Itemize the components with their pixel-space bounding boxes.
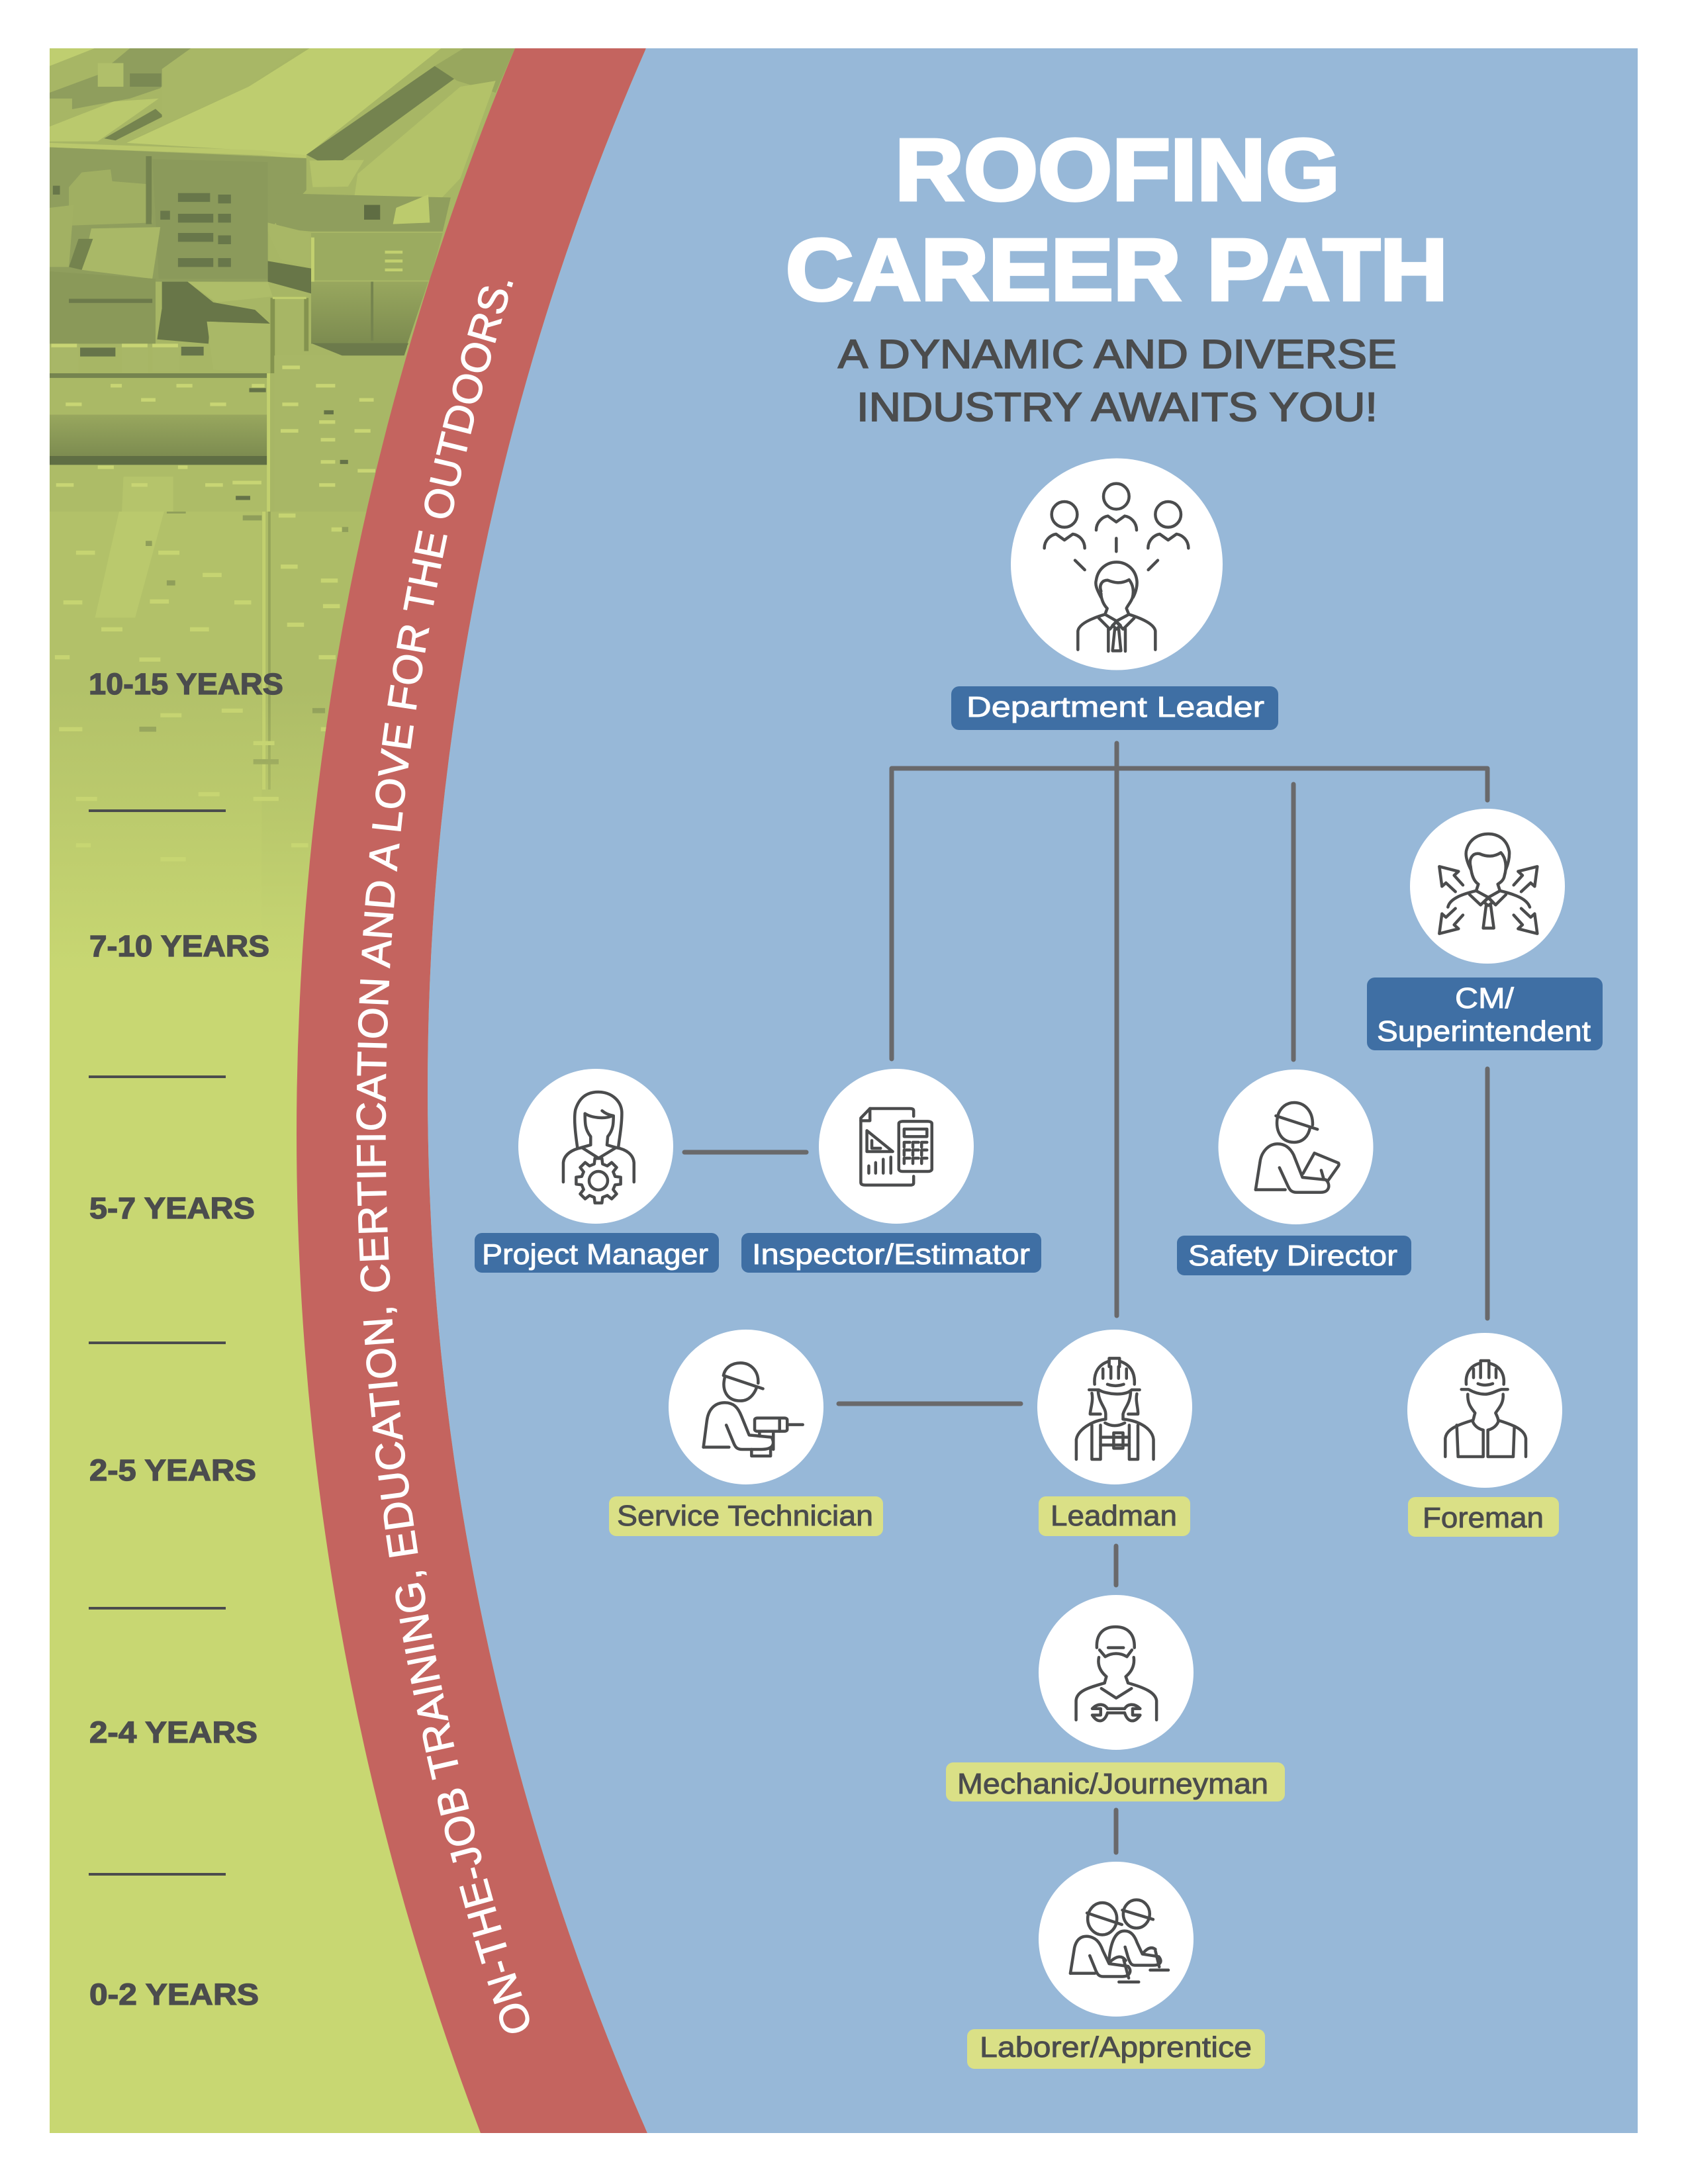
node: CM / Superintendent [1367,809,1603,1050]
node: Department Leader [951,458,1278,730]
timeline: years of experience: 10-15 YEARS [89,667,283,701]
timeline: years of experience: 2-4 YEARS [89,1715,258,1749]
title [786,121,1448,318]
label: CM / Superintendent: CM/ [1455,982,1515,1015]
node: Safety Director [1177,1069,1411,1275]
icon: woman with gear [563,1092,634,1203]
photo: roofing building aerial tinted green [50,48,530,889]
label: Service Technician: Service Technician [617,1500,873,1532]
curved band: red arc [297,48,647,2133]
icon: manager with arrows [1439,834,1537,934]
icon: technician with drill [704,1363,803,1456]
timeline: years of experience: 0-2 YEARS [89,1978,259,2011]
timeline: years of experience: 5-7 YEARS [89,1191,255,1225]
label: Department Leader: Department Leader [966,691,1264,723]
label: Leadman [1039,1496,1190,1536]
label: Safety Director [1177,1236,1411,1275]
node: Service Technician [609,1330,883,1536]
icon: plans and calculator [861,1109,932,1185]
label: Project Manager: Project Manager [482,1238,708,1271]
timeline: years of experience [89,667,283,2011]
icon: worker with clipboard [1256,1103,1339,1193]
node: Laborer/Apprentice [967,1862,1265,2069]
subtitle: INDUSTRY AWAITS YOU! [857,385,1378,430]
node: Foreman [1407,1333,1562,1537]
label: Leadman: Leadman [1051,1500,1177,1532]
subtitle [838,332,1397,430]
node: Inspector/Estimator [741,1069,1041,1273]
icon: worker with hard hat and harness [1076,1358,1154,1459]
label: CM / Superintendent [1367,978,1603,1050]
label: Safety Director: Safety Director [1188,1240,1397,1272]
curved text: training tagline: ON-THE-JOB TRAINING, EDUCATION, CERTIFICATION AND A LOVE FOR THE OUTDOORS. [356,281,530,2033]
timeline: years of experience: 2-5 YEARS [89,1453,256,1487]
title: CAREER PATH [786,221,1448,318]
node: Leadman [1037,1330,1192,1536]
timeline: years of experience: 7-10 YEARS [89,929,269,963]
subtitle: A DYNAMIC AND DIVERSE [838,332,1397,377]
icon: foreman with hard hat and vest [1445,1361,1526,1457]
node: Project Manager [475,1069,719,1273]
icon: two apprentices working [1070,1900,1168,1982]
icon: mechanic with wrench [1076,1627,1156,1721]
panel: blue career chart background [428,48,1638,2133]
label: Inspector/Estimator [741,1233,1041,1273]
label: Department Leader [951,686,1278,730]
label: Mechanic/Journeyman: Mechanic/Journeyman [957,1768,1268,1800]
connector lines [684,743,1487,1852]
label: Foreman [1408,1497,1559,1537]
label: Inspector/Estimator: Inspector/Estimator [752,1238,1030,1271]
label: Laborer/Apprentice [967,2029,1265,2069]
label: CM / Superintendent: Superintendent [1377,1015,1591,1048]
title: ROOFING [895,121,1340,218]
label: Foreman: Foreman [1423,1502,1544,1534]
node: Mechanic/Journeyman [946,1595,1285,1801]
icon: leader with team [1045,484,1188,651]
panel: lime timeline background [50,48,645,2133]
label: Laborer/Apprentice: Laborer/Apprentice [980,2031,1252,2064]
